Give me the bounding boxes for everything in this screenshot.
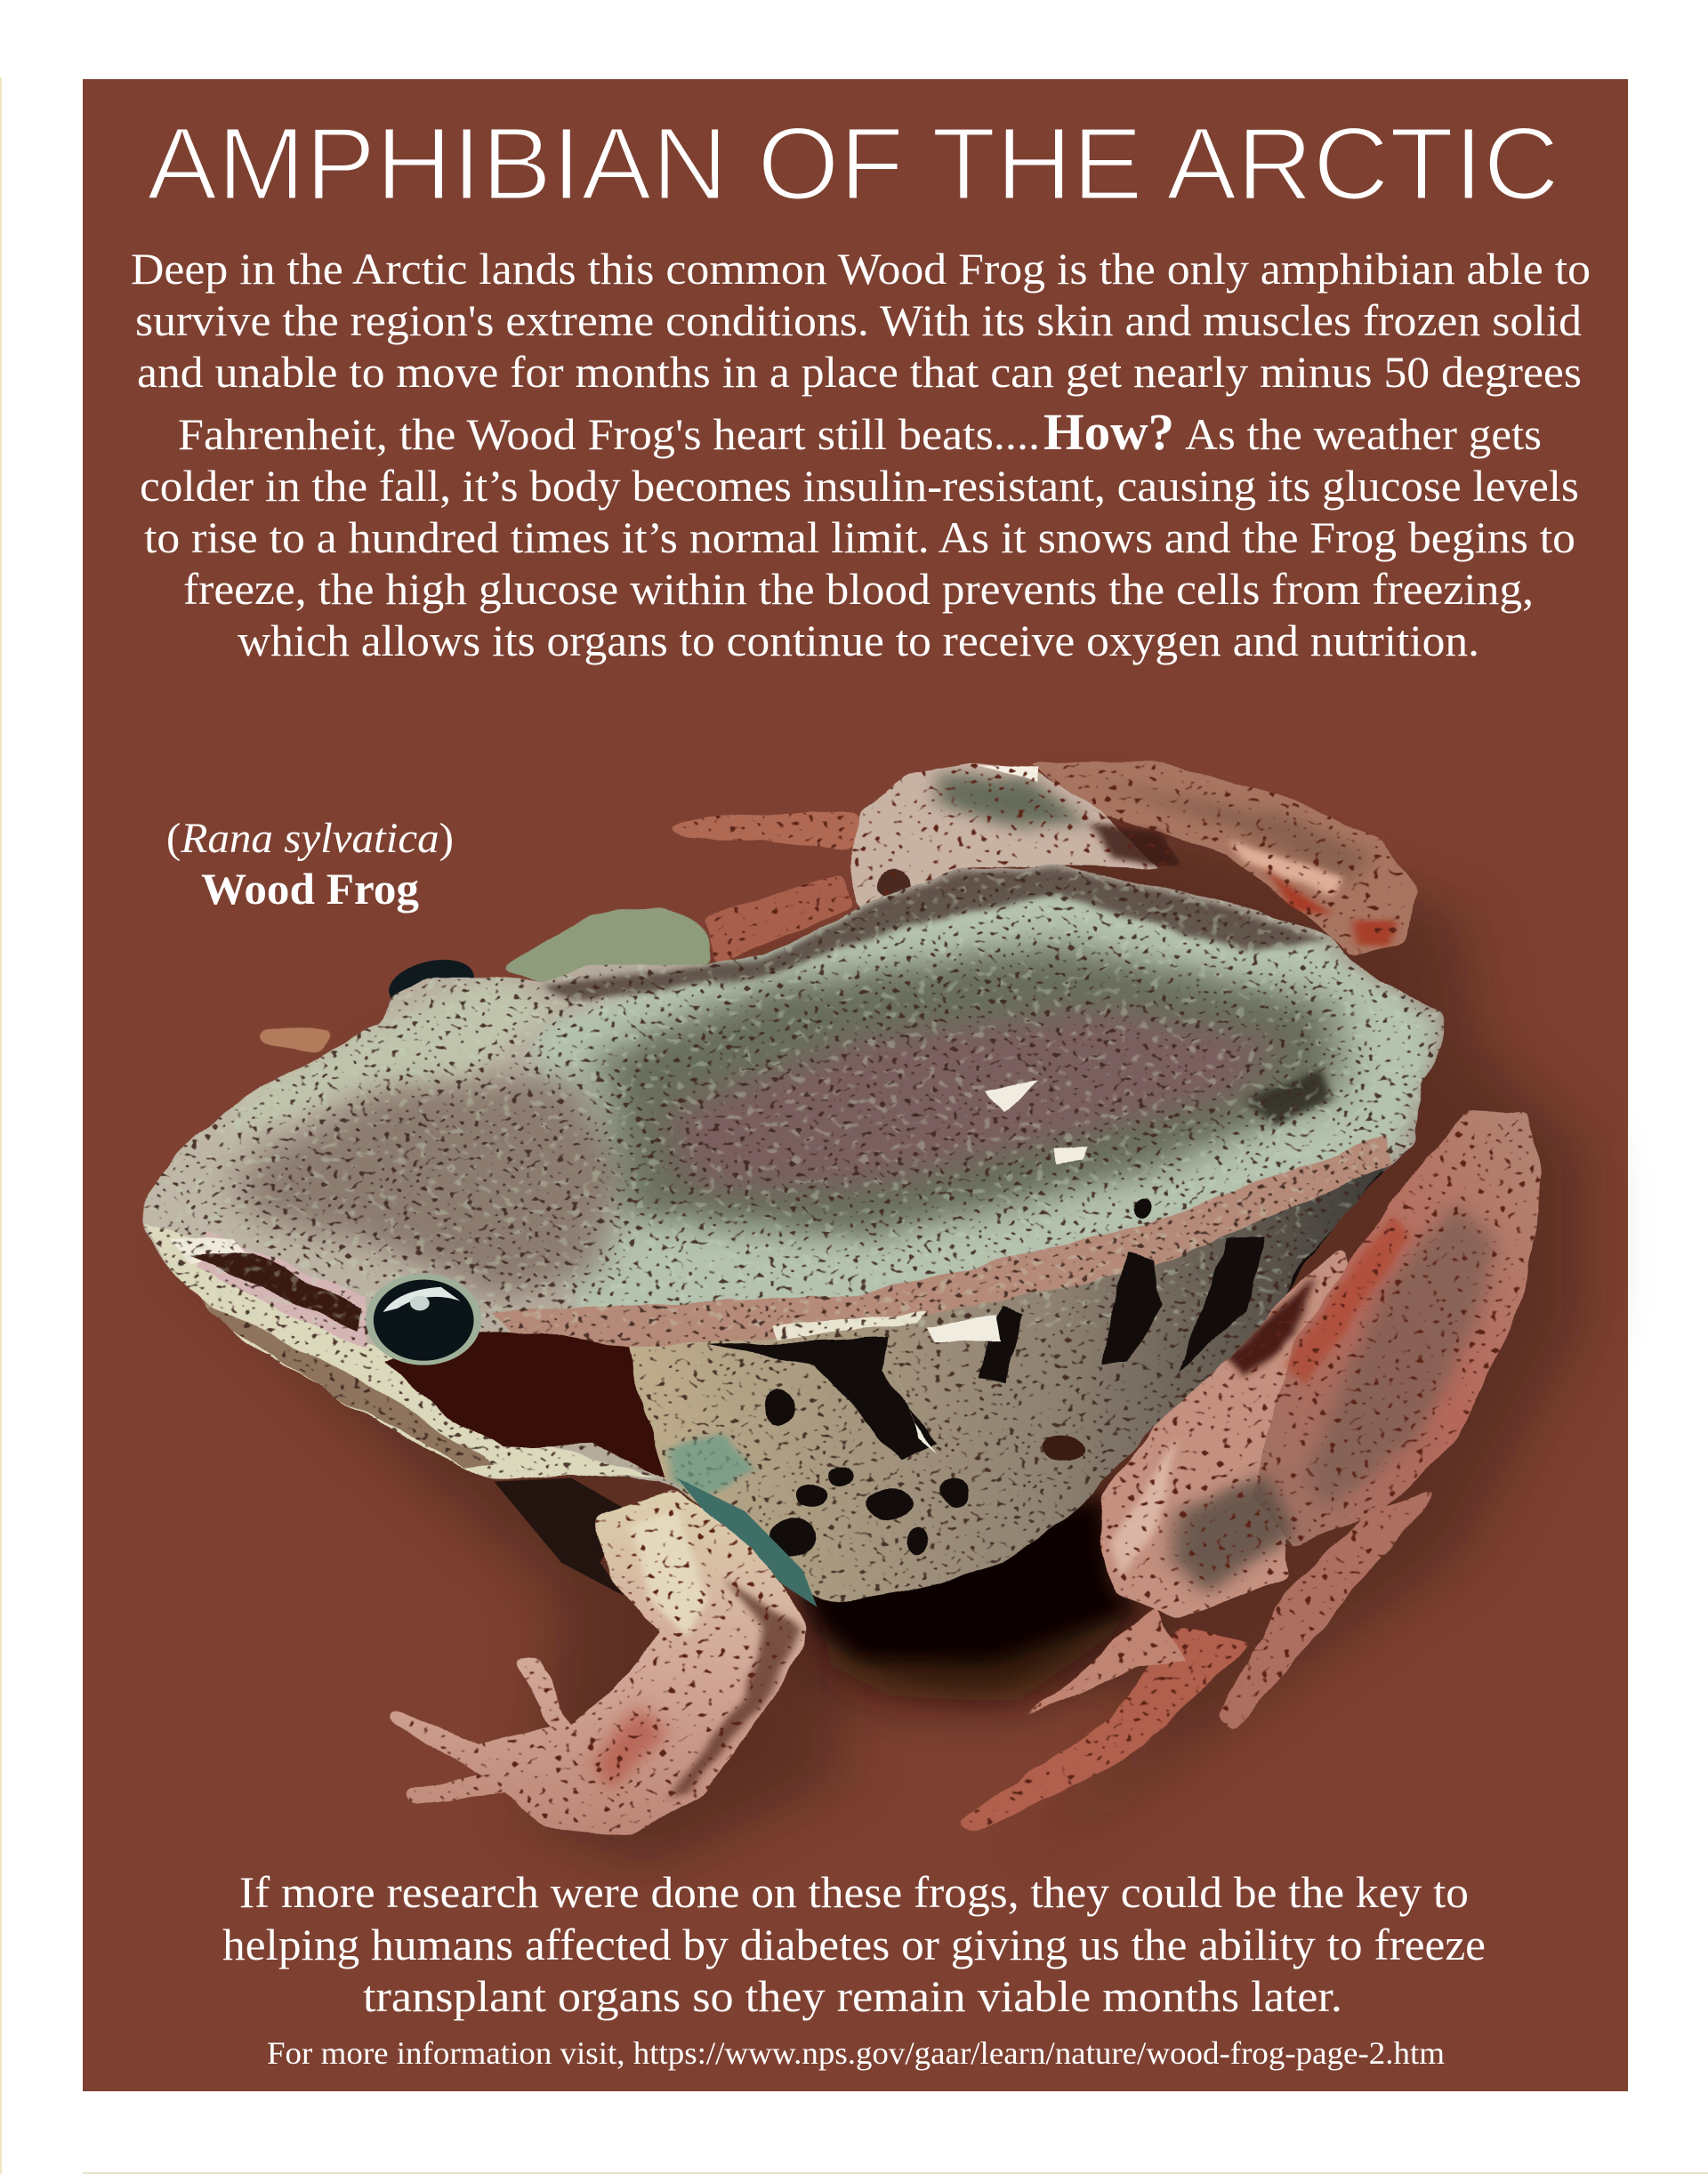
lower leg — [1100, 1245, 1382, 1618]
intro text block — [131, 244, 1591, 665]
thigh — [1251, 1109, 1543, 1548]
intro text block: and unable to move for months in a place that can get nearly minus 50 degrees — [137, 347, 1582, 397]
dark tympanum mask — [383, 1333, 665, 1478]
lower leg grey patch — [1169, 1474, 1294, 1592]
lower flank — [629, 1164, 1391, 1603]
upper toes — [663, 812, 860, 965]
pale highlight — [1111, 1437, 1179, 1577]
pale marks — [890, 1080, 1087, 1456]
long toe — [955, 1625, 1251, 1832]
intro text block: freeze, the high glucose within the blood prevents the cells from freezing, — [183, 564, 1534, 614]
intro text block: to rise to a hundred times it’s normal limit. As it snows and the Frog begins to — [144, 512, 1575, 562]
intro text block: survive the region's extreme conditions. With its skin and muscles frozen solid — [135, 295, 1582, 345]
frog illustration — [127, 761, 1584, 1870]
dark lip line — [195, 1297, 494, 1467]
species label: (Rana sylvatica) — [166, 815, 454, 862]
dark speckled patch — [1227, 1276, 1314, 1379]
arm shape — [388, 1489, 808, 1836]
intro text block: colder in the fall, it’s body becomes insulin-resistant, causing its glucose levels — [140, 461, 1579, 511]
dark top rim — [543, 870, 1324, 1002]
species label — [166, 815, 454, 914]
far toe — [253, 1028, 340, 1052]
shin highlight — [1227, 840, 1342, 896]
knee white mark — [976, 765, 1039, 783]
eye — [366, 1274, 481, 1365]
dark stripe — [190, 1253, 364, 1331]
dark rear patch — [1246, 1068, 1333, 1128]
speckle overlays — [127, 855, 1459, 1614]
lip cream — [147, 1223, 658, 1482]
foreleg top — [499, 905, 714, 982]
dorsal mauve centre — [668, 1010, 1276, 1187]
upper hind leg — [849, 761, 1418, 956]
species label: Wood Frog — [201, 864, 419, 914]
red stripe — [1285, 1216, 1410, 1386]
red forearm — [591, 1703, 668, 1792]
black flank markings — [706, 1164, 1401, 1556]
shin shading — [1092, 781, 1372, 884]
body base — [127, 855, 1459, 1614]
intro text block: How? — [1043, 403, 1174, 461]
body — [127, 855, 1459, 1614]
pale head top edge — [224, 977, 552, 1142]
teal arm edge — [677, 1478, 818, 1607]
intro text block: As the weather gets — [1185, 409, 1542, 459]
armpit dark patch — [494, 1478, 629, 1596]
closing text block: helping humans affected by diabetes or giving us the ability to freeze — [222, 1920, 1486, 1969]
teal shoulder patch — [668, 1434, 754, 1496]
pink dorsolateral fold — [494, 1135, 1391, 1349]
pale stripe — [774, 1312, 928, 1339]
knee spot — [878, 871, 911, 898]
shin — [1029, 761, 1418, 956]
intro text block: Deep in the Arctic lands this common Wood Frog is the only amphibian able to — [131, 244, 1591, 294]
head patch — [234, 1076, 629, 1297]
title: AMPHIBIAN OF THE ARCTIC — [147, 106, 1559, 221]
white nostril patch — [171, 1238, 248, 1264]
outer toe — [1218, 1489, 1439, 1734]
left edge line — [0, 77, 2, 2174]
pink snout stripe — [195, 1231, 368, 1349]
arm pale tendon — [629, 1511, 706, 1637]
arm limb — [388, 1489, 808, 1836]
knee — [849, 762, 1159, 910]
bottom edge line — [83, 2172, 1708, 2174]
short toe — [991, 1607, 1184, 1733]
closing text block: If more research were done on these frogs, they could be the key to — [239, 1867, 1469, 1917]
pale green dorsal — [504, 877, 1439, 1319]
dorsal green edge — [600, 943, 1342, 1238]
intro text block: which allows its organs to continue to receive oxygen and nutrition. — [238, 616, 1479, 665]
intro text block: Fahrenheit, the Wood Frog's heart still beats.... — [178, 409, 1040, 459]
shin tip red mark — [1352, 922, 1396, 947]
knee green patch — [938, 774, 1092, 825]
knee dark patch — [1092, 822, 1188, 870]
front leg — [388, 1478, 818, 1836]
drop shadows — [185, 793, 1584, 1870]
closing text block — [222, 1867, 1486, 2021]
shin red mark — [1266, 870, 1333, 914]
thigh shading — [1304, 1202, 1497, 1511]
closing text block: transplant organs so they remain viable months later. — [363, 1971, 1342, 2021]
right hind leg — [955, 1109, 1543, 1832]
brown speckle — [668, 1577, 802, 1799]
source link: For more information visit, https://www.nps.gov/gaar/learn/nature/wood-frog-page-2.htm — [267, 2035, 1445, 2071]
far eye — [379, 951, 483, 1017]
